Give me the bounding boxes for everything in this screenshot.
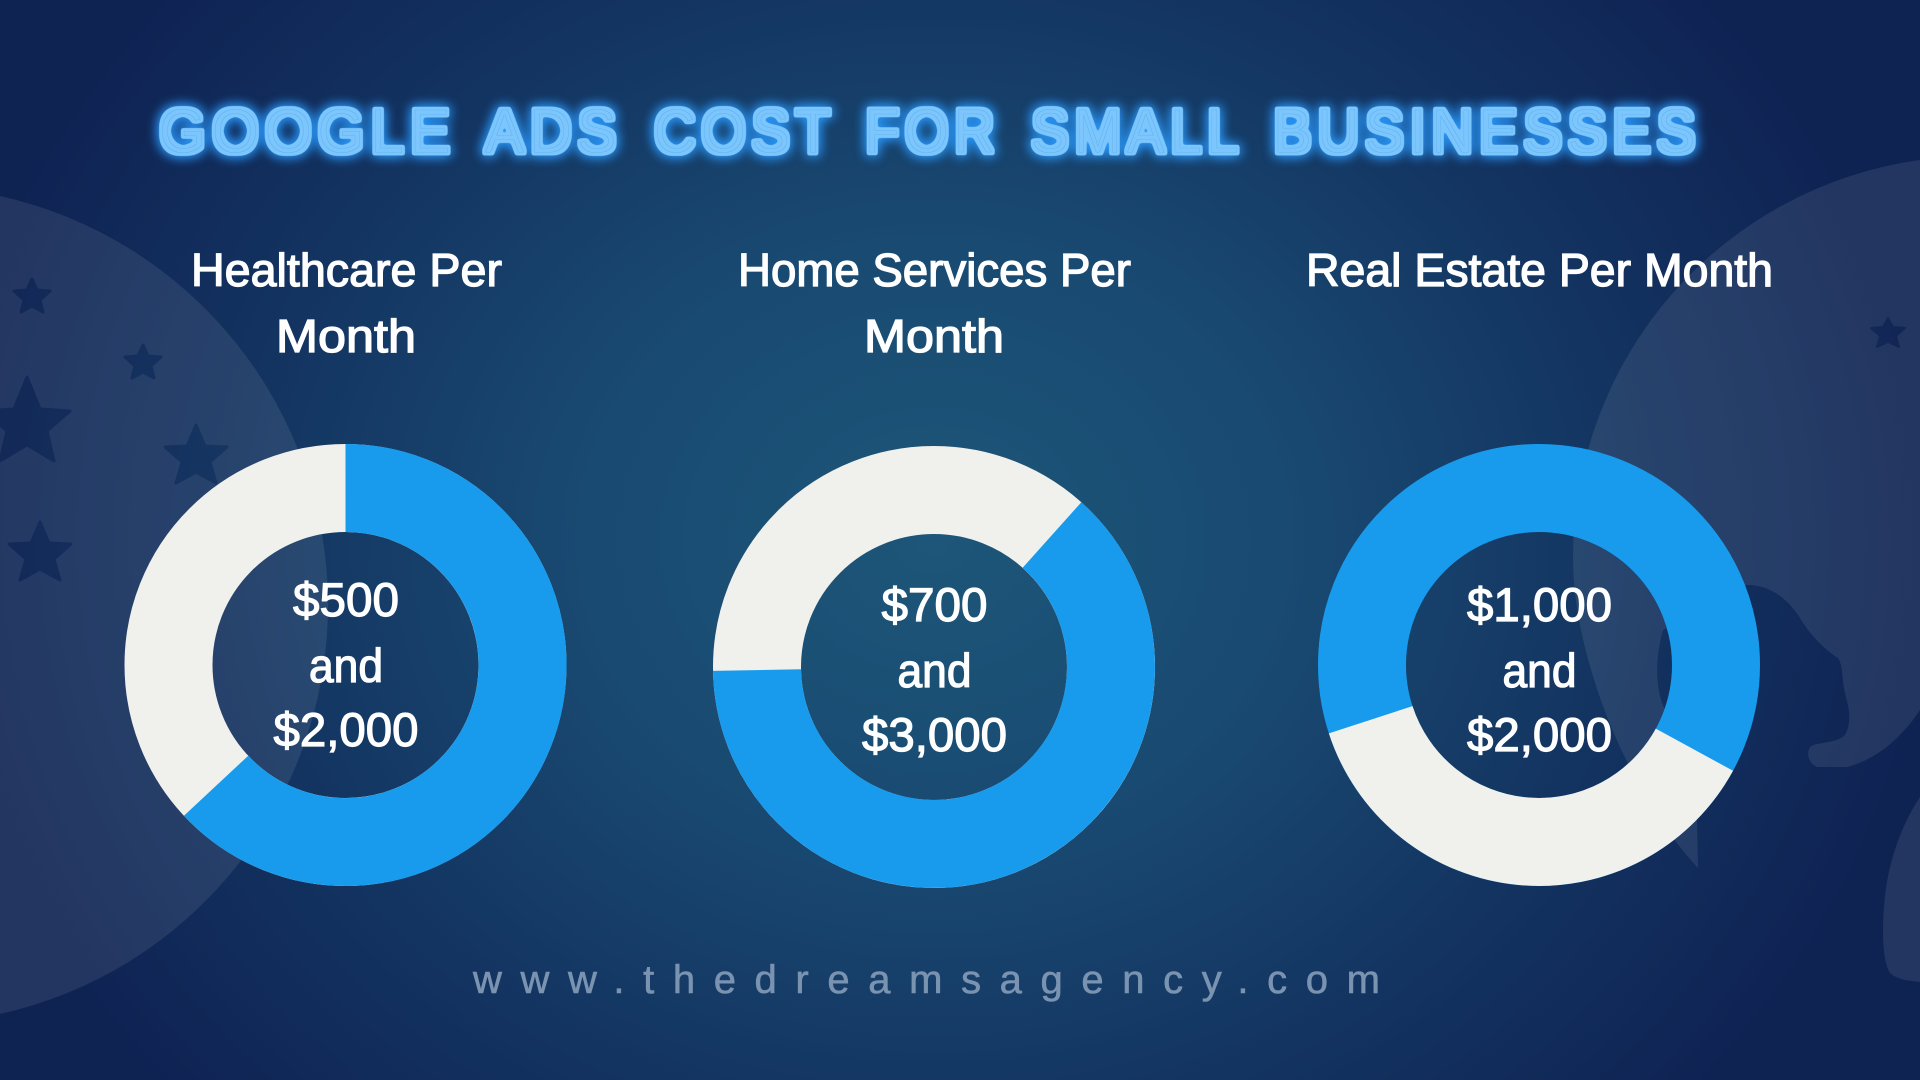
panel: real estate (1306, 244, 1773, 842)
value: $500 and $2,000: $2,000 (274, 703, 418, 756)
title: COST (654, 98, 836, 166)
title: BUSINESSES (1273, 98, 1701, 166)
heading: healthcare per month: Month (276, 310, 416, 362)
heading: real estate per month: Real Estate Per Month (1306, 244, 1773, 296)
value: $1,000 and $2,000 (1467, 578, 1612, 761)
value: $700 and $3,000: and (898, 644, 972, 697)
value: $500 and $2,000: $500 (293, 573, 399, 626)
decoration: right moon with silhouette (1573, 160, 1920, 868)
value: $700 and $3,000: $3,000 (862, 708, 1007, 761)
decoration: left moon with stars (0, 196, 328, 1014)
value: $700 and $3,000 (862, 578, 1007, 761)
panel: healthcare (168, 244, 523, 842)
value: $1,000 and $2,000: $1,000 (1467, 578, 1612, 631)
donut chart: healthcare (168, 488, 523, 842)
value: $500 and $2,000: and (309, 639, 383, 692)
heading: home services per month: Month (864, 310, 1004, 362)
footer: website url: www.thedreamsagency.com (472, 958, 1380, 1002)
donut chart: real estate (1362, 488, 1716, 842)
title: ADS (485, 98, 622, 166)
title: FOR (865, 98, 1000, 166)
donut chart: home services (757, 490, 1111, 844)
title: SMALL (1031, 98, 1244, 166)
heading: home services per month (738, 244, 1131, 362)
value: $1,000 and $2,000: $2,000 (1467, 708, 1612, 761)
heading: healthcare per month: Healthcare Per (191, 244, 502, 296)
value: $500 and $2,000 (274, 573, 418, 756)
title (159, 98, 1701, 166)
title: GOOGLE (159, 98, 456, 166)
heading: home services per month: Home Services Per (738, 244, 1131, 296)
panel: home services (738, 244, 1131, 844)
value: $1,000 and $2,000: and (1502, 644, 1576, 697)
heading: healthcare per month (191, 244, 502, 362)
decoration: lower right moon (1883, 797, 1920, 982)
value: $700 and $3,000: $700 (882, 578, 988, 631)
